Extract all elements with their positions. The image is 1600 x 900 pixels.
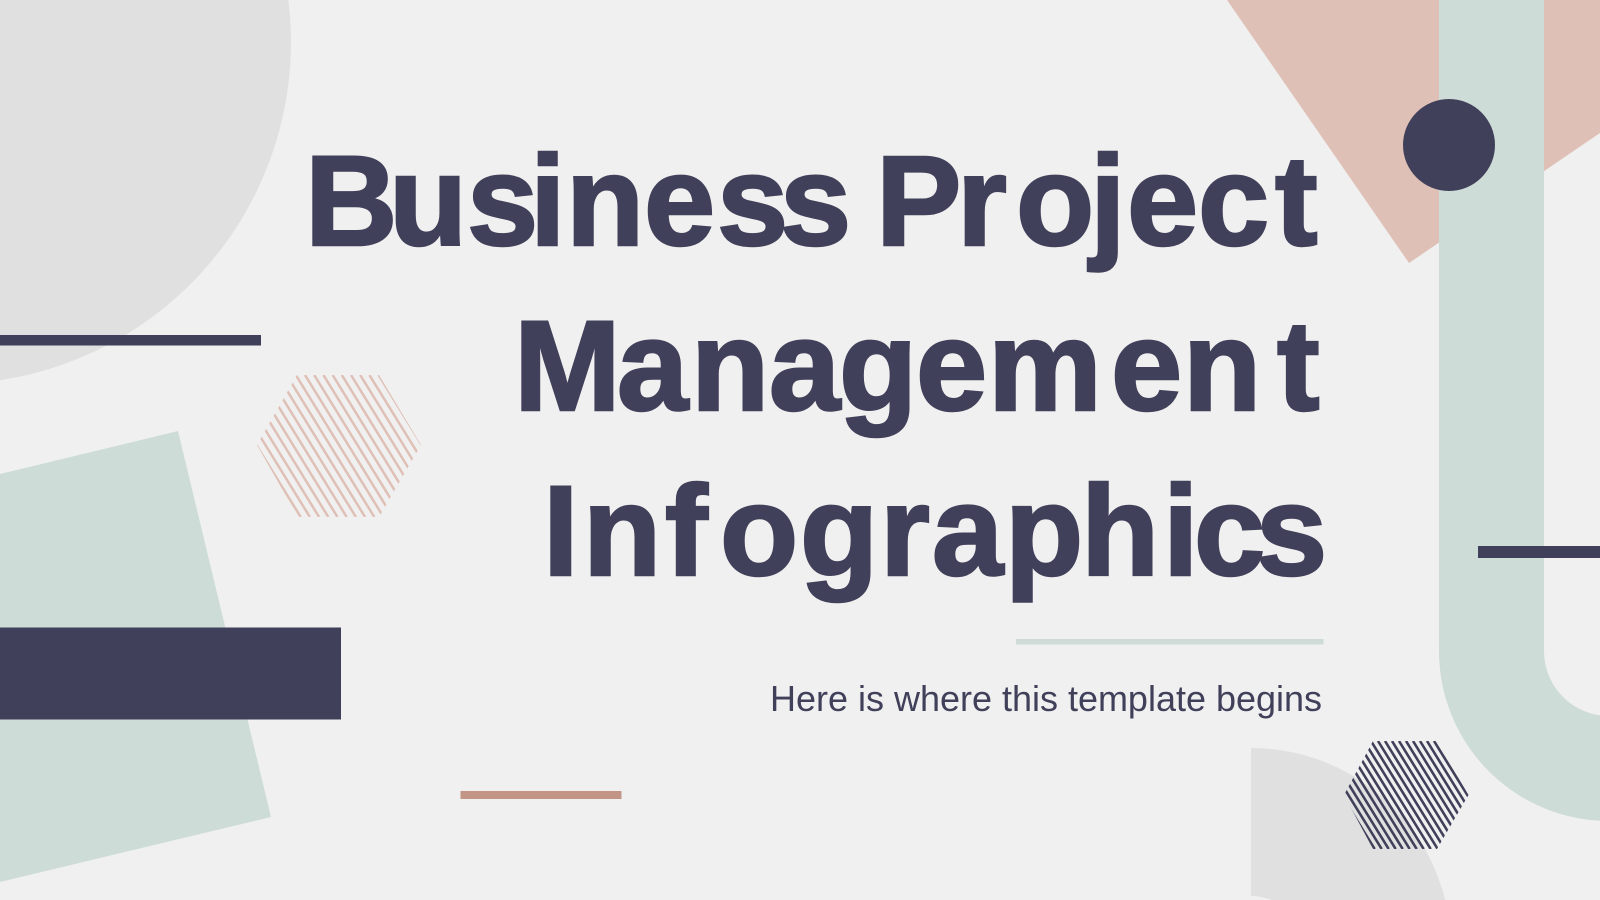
bar: salmon line (460, 791, 622, 799)
shape: gray ring bottom right (1251, 748, 1445, 900)
shape: green tilted rectangle (0, 431, 271, 882)
icon: navy striped hexagon (1345, 741, 1468, 849)
shape: green curved band (1439, 0, 1600, 821)
subtitle: Here is where this template begins (770, 678, 1322, 719)
bar: navy block (0, 628, 341, 720)
title: Business Project (305, 130, 1318, 273)
icon: pink striped hexagon (257, 375, 421, 517)
title: Infographics (543, 460, 1327, 603)
bar: navy line right (1478, 546, 1600, 558)
shape: navy circle (1403, 99, 1495, 191)
shape: salmon triangle top right (1227, 0, 1600, 263)
title: Management (514, 295, 1320, 438)
divider: green rule under title (1016, 639, 1324, 644)
bar: navy line top left (0, 335, 261, 346)
title (305, 130, 1327, 603)
shape: gray circle top left (0, 0, 291, 380)
